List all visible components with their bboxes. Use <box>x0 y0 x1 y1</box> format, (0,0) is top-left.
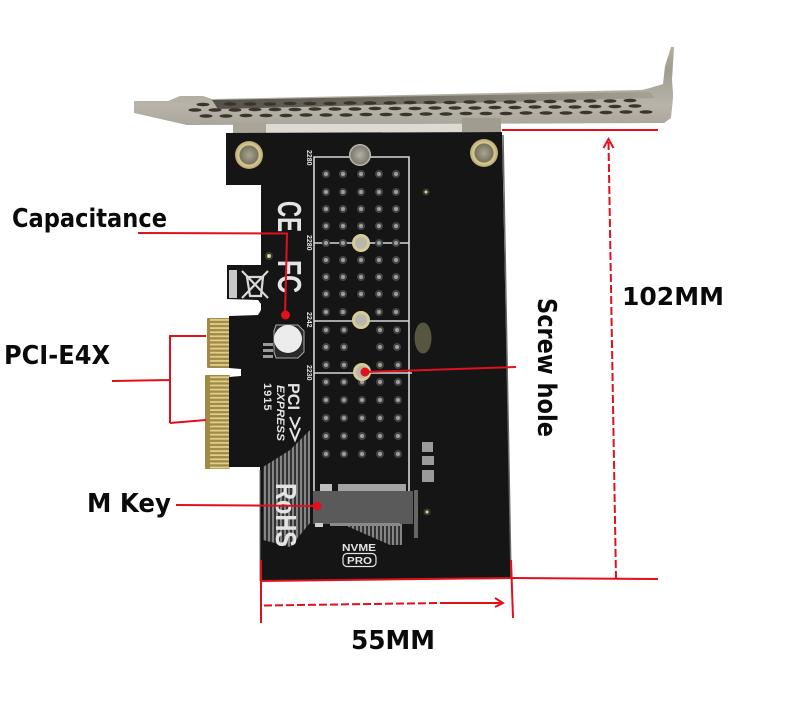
slot size labels: 2280 <box>305 235 312 251</box>
M.2 slot outline <box>314 157 412 493</box>
M key connector <box>313 484 413 527</box>
NVME PRO logo <box>342 542 376 567</box>
label: 55MM: 55MM <box>351 626 435 656</box>
via dots <box>266 190 430 514</box>
capacitor <box>274 325 304 358</box>
dimension: 55MM width <box>260 560 658 623</box>
bracket: metal PCI bracket <box>134 47 674 133</box>
trace fan <box>263 430 310 547</box>
slot size labels: 2280 <box>305 150 312 166</box>
slot size labels: 2230 <box>305 365 312 381</box>
leader line: M Key <box>176 502 322 510</box>
dimension: 102MM height <box>502 130 658 578</box>
RoHS mark: RoHS <box>269 483 301 547</box>
label: PCI-E4X: PCI-E4X <box>4 341 110 371</box>
slot size labels <box>305 150 312 381</box>
NVME PRO logo: NVME <box>342 542 376 554</box>
leader line: Capacitance <box>138 233 290 320</box>
PCI Express logo: PCI <box>284 383 303 410</box>
leader line: Screw hole <box>360 367 516 376</box>
label: M Key: M Key <box>87 489 171 519</box>
label: Capacitance: Capacitance <box>12 204 167 234</box>
mounting screws <box>235 139 498 169</box>
solder hole grid <box>323 171 401 457</box>
date code 1915: 1915 <box>261 383 273 411</box>
bracket ventilation holes <box>188 99 652 118</box>
M.2 screw standoffs <box>354 236 370 380</box>
PCI Express logo: EXPRESS <box>274 385 286 442</box>
traces below connector <box>340 523 402 545</box>
WEEE recycling icon <box>229 270 268 298</box>
NVME PRO logo: PRO <box>347 555 372 567</box>
CE mark: CE <box>271 201 308 232</box>
bracket leader: PCI-E4X <box>112 336 206 423</box>
circuit board <box>226 132 511 581</box>
gold fingers: PCI-E edge connector <box>205 318 230 469</box>
PCI Express logo <box>274 383 303 442</box>
label: Screw hole: Screw hole <box>531 298 561 437</box>
component pad <box>414 322 432 354</box>
small components <box>263 343 434 482</box>
slot size labels: 2242 <box>305 312 312 328</box>
FCC mark: FC <box>271 260 308 293</box>
label: 102MM: 102MM <box>622 282 724 311</box>
